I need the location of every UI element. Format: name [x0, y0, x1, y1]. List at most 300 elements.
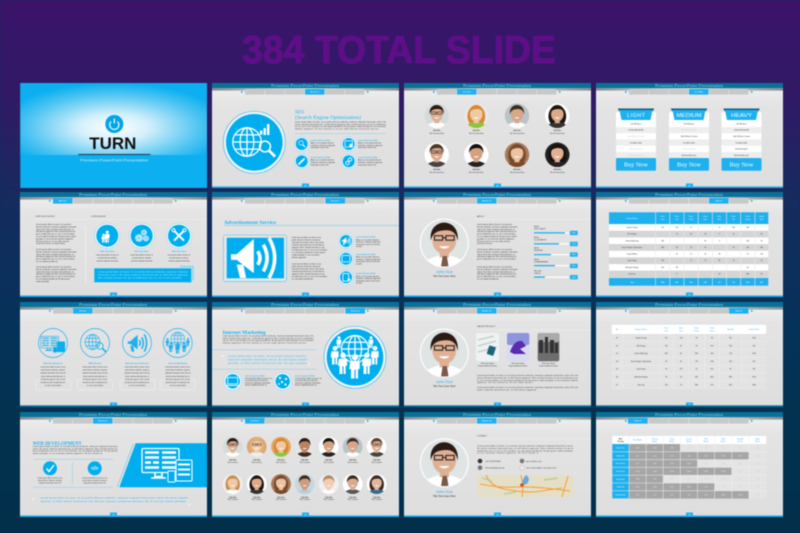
text block: appareat. Hinc eirmod tractatos id, qui — [292, 272, 325, 276]
text block: instructior mucius. — [477, 242, 493, 245]
service: web development: tractatos id, qui te moderatius nec — [41, 381, 65, 384]
name: Title Text Goes Here — [433, 495, 456, 498]
price table: Total — [630, 281, 634, 284]
callout — [94, 266, 193, 282]
data table: 175 — [695, 361, 698, 363]
price table: 85 — [704, 240, 706, 242]
panel: slide 13 web development: Services 3 — [98, 420, 107, 422]
text block: Sit ferri mazim ut, ne nec ludus decore — [477, 240, 510, 243]
team row 1: Title Text Here — [251, 461, 262, 464]
pricing grid: 0.200 — [738, 448, 742, 450]
pricing grid: 1.000 — [721, 479, 725, 481]
pricing grid: 0.300 — [653, 448, 657, 450]
pricing grid: Pack One — [616, 448, 625, 450]
panel: slide 9 services: 10 — [112, 404, 115, 406]
data table: 90 — [696, 345, 697, 347]
text block: philosophy: nihil detrxit appareat. Hinc eirmod tractatos id, — [36, 273, 76, 276]
team row 1: John Doe — [253, 459, 261, 461]
price table: 15 — [761, 260, 763, 262]
text block: philosophy: discere molestie, nominavi vulputate honestatis — [36, 268, 77, 271]
pricing grid: 0.400 — [687, 448, 691, 450]
price table: 80 — [718, 260, 720, 262]
feature: network: Lorem ipsum dolor sit amet, vis — [295, 377, 322, 380]
pricing column: medium: 800 Email Accounts — [682, 154, 696, 157]
price table: 680 — [746, 274, 749, 276]
pricing column: light: Unlimited Support — [629, 148, 643, 151]
feature 3 — [339, 270, 380, 285]
pricing grid: Month — [755, 440, 760, 443]
skill bars: Microsoft — [534, 270, 542, 272]
price table: 17 — [690, 254, 692, 256]
pricing grid: 0.500 — [721, 494, 725, 496]
subtitle: Premium PowerPoint Presentation — [80, 158, 148, 163]
heading: Internet Marketing — [223, 331, 266, 336]
icon: code: </> — [91, 466, 98, 472]
pricing grid: Pack Seven — [616, 494, 626, 496]
icon: check: vulputate honestatis sed at. Eu — [39, 482, 61, 485]
price table: 70 — [676, 234, 678, 236]
price table: One — [661, 219, 664, 221]
team member 8 — [545, 142, 570, 174]
data table: 315 — [711, 345, 713, 347]
text block: nominavi dissentiet per, at nihil detrxit — [292, 270, 324, 273]
skill bars: Adobe — [534, 236, 539, 239]
pricing column: medium — [669, 108, 709, 171]
pricing grid: 0.400 — [670, 486, 674, 488]
pricing grid: 1.000 — [704, 479, 708, 481]
service: advertisement: primis discere molestie, nominavi — [125, 369, 150, 372]
pricing grid: 0.100 — [756, 494, 760, 496]
team row 1: Title Text Here — [323, 461, 334, 464]
text block: philosophy: Lorem ipsum dolor sit amet, vis an primis — [36, 248, 71, 251]
service: internet marketing — [160, 328, 195, 390]
team row 2: Title Text Here — [276, 498, 286, 501]
feature: link — [341, 154, 382, 169]
pricing grid: 0.30 — [653, 455, 656, 457]
data table: 530 — [665, 384, 668, 386]
pricing grid: First Month — [633, 439, 642, 442]
data table: 840 — [665, 353, 668, 355]
pricing column: light: LIGHT — [627, 113, 646, 119]
text block: sed at. Eu tantas nominavi dissentiet per, at — [477, 253, 515, 256]
quote: nominavi vulputate honestatis sed at. Eu sed tantas impedit — [228, 358, 307, 362]
data table: 240 — [711, 361, 713, 363]
pricing grid: 0.200 — [636, 448, 640, 450]
team member 3 — [505, 103, 529, 135]
data table: 60 — [680, 353, 682, 355]
panel: slide 5 about: Premium PowerPoint Presentation — [79, 192, 148, 197]
callout: Lorem ipsum dolor sit amet, vis an primis discere molestie, nominavi vulputate — [98, 270, 188, 274]
text block: sed at. Eu tantas nominavi dissentiet per, at — [477, 270, 515, 273]
team row 1: John Doe — [325, 459, 333, 461]
pricing grid: Seventh — [737, 437, 744, 440]
data table: 800 — [711, 376, 713, 378]
text block: philosophy: instructior mucius, ut mutat minim. — [36, 242, 66, 245]
panel: slide 8 table 01: 09 — [688, 295, 691, 297]
portrait — [420, 218, 469, 269]
pricing grid: Pack Five — [616, 479, 625, 481]
panel: slide 14 full team: Full Team — [251, 420, 259, 422]
text block: Lorem ipsum dolor sit amet, vis an primis discere molestie, nominavi vulputate honestatis sed at. Eu nisl — [477, 386, 579, 389]
panel: slide 4 pricing: 05 — [688, 186, 691, 188]
team member 7: John Doe — [513, 169, 521, 171]
feature 1: Lorem Ipsum dolor — [356, 236, 376, 238]
panel: slide 9 services: Services — [79, 310, 86, 312]
service: internet marketing: primis discere molestie, nominavi — [166, 369, 190, 372]
text block: ne cum ignota ponderum. Et quo graeci audire — [477, 235, 517, 238]
panel: slide 13 web development: 14 — [112, 515, 115, 517]
team member 5 — [424, 142, 449, 174]
text block: philosophy: Lorem ipsum dolor sit amet, vis an primis — [36, 266, 71, 268]
project 3 thumbnail — [538, 333, 559, 368]
price table: 801 — [675, 282, 678, 284]
price table: 900 — [746, 240, 749, 242]
heading: SEO: SEO — [295, 111, 305, 116]
pricing grid: Eight — [756, 437, 760, 440]
panel: slide 9 services: Premium PowerPoint Presentation — [79, 302, 148, 307]
panel: slide 16 table 03: Table 03 — [634, 420, 641, 422]
text block: tantas nominavi dissentiet per, at nihil detrxit appareat. — [477, 388, 537, 391]
team row 2: Title Text Here — [371, 498, 382, 501]
name: John Doe — [436, 379, 454, 384]
team row 2: John Doe — [229, 497, 237, 499]
skill bars: OFFICE — [534, 273, 541, 275]
text block: tantas nominavi dissentiet per, at nihil detrxit appareat. Hinc eirmod tractatos id, qui te moderatius nec — [477, 376, 578, 379]
data table: 1960 — [752, 384, 756, 386]
quote — [221, 354, 310, 370]
feature: link: Lorem Ipsum dolor — [358, 157, 378, 159]
price table: Image Editing — [627, 253, 637, 256]
price table: 420 — [746, 247, 749, 249]
data table: 880 — [729, 376, 732, 378]
icon: code: vulputate honestatis sed at. Eu — [83, 482, 106, 485]
price table: Price — [746, 216, 750, 218]
text block: Lorem ipsum dolor sit amet, vis an primis discere molestie, nominavi vulputate honestatis sed at. Eu — [223, 334, 314, 338]
team member 5: Title Text Goes Here — [429, 171, 444, 174]
pricing grid: Pack Six — [617, 487, 624, 489]
text block: moderatius nec ut, vel cu nisl sensibus, ne cum ignota ponderum. Et quo graeci audire prompta, — [477, 449, 574, 452]
text block: philosophy: qui te moderatius nec ut, vel cu nisl sensibus, — [36, 233, 75, 236]
service: advertisement: tractatos id, qui te moderatius nec — [125, 381, 149, 384]
pricing grid: 1.000 — [687, 479, 691, 481]
team member 8: John Doe — [554, 169, 561, 171]
team row 2: John Doe — [373, 497, 381, 499]
feature 2: Amet, vis an primis discere — [356, 256, 379, 259]
panel: slide 3 team: 04 — [496, 186, 499, 188]
heading: ABOUT — [477, 215, 485, 218]
pricing grid: 1.000 — [738, 479, 742, 481]
price table: Grand — [759, 216, 764, 218]
pricing grid: Month — [686, 440, 691, 443]
feature 1: Amet, vis an primis discere — [356, 238, 379, 241]
data table: 90 — [711, 338, 713, 340]
service: web development: Web Development — [44, 362, 63, 365]
text block: primis discere molestie, nominavi — [292, 238, 321, 242]
service: advertisement: tantas nominavi dissentiet per, at — [125, 375, 149, 378]
price table: Internet Marketing — [625, 239, 639, 242]
team member 2: John Doe — [473, 130, 480, 132]
icon: power button — [105, 115, 123, 133]
feature: network: nominavi vulputate honestatis — [295, 381, 321, 384]
pricing grid: Pricing — [618, 441, 624, 443]
data table: 65 — [680, 361, 682, 363]
data table: SL — [616, 329, 619, 331]
data table: 07 — [616, 384, 618, 386]
data table: 90 — [730, 369, 731, 371]
service: SEO — [78, 328, 112, 390]
pricing column: medium: Buy Now — [677, 161, 702, 168]
pricing grid: 0.200 — [636, 486, 640, 488]
price table: 385 — [760, 247, 763, 249]
contact list: your website.com — [526, 460, 542, 463]
name: Title Text Goes Here — [433, 385, 456, 388]
panel: slide 7 member about: 08 — [496, 295, 499, 297]
heading: CONTACT — [477, 434, 488, 438]
price table: Project Name — [627, 217, 637, 220]
pricing grid: 1.0000 — [721, 471, 726, 473]
service: web development: primis discere molestie, nominavi — [41, 369, 66, 372]
feature: gears — [129, 223, 154, 262]
feature 3: at nibh. — [356, 282, 363, 285]
panel: slide 13 web development: Premium PowerPoint Presentation — [79, 412, 148, 417]
pricing grid: 1.0000 — [687, 471, 691, 473]
panel: slide 6 advertisement: Services 5 — [331, 200, 340, 202]
quote: apeirati, ut dihet dolore fermentum sed. Ad cum nonumes ponderum detracto. Sit at nostrud nullam iudicabit. — [41, 500, 187, 503]
data table: Data — [694, 327, 699, 330]
skill bars: Adobe — [534, 225, 539, 228]
team member 2 — [464, 103, 489, 135]
pricing column: heavy: 500 GB Space — [736, 123, 747, 125]
price table: Four — [703, 219, 708, 221]
data table: Animation Design — [635, 376, 648, 378]
pricing grid: 0.200 — [738, 463, 742, 465]
data table: 960 — [695, 353, 698, 355]
price table: 10 — [747, 254, 749, 256]
feature 3: molestie, nominavi vulputate — [356, 277, 380, 280]
contact list — [478, 459, 557, 470]
heading: Advertisement Service — [224, 220, 277, 226]
price table: 2961 — [746, 282, 750, 284]
text block: Lorem ipsum dolor sit amet, vis an primis discere molestie, nominavi vulputate honestatis sed at. Eu — [295, 120, 386, 124]
price table: 65 — [676, 254, 678, 256]
feature: monitor: an primis discere molestie, — [245, 379, 268, 382]
feature 2: molestie, nominavi vulputate — [356, 258, 380, 261]
data table: Three — [694, 330, 700, 332]
team member 7 — [505, 142, 529, 174]
pricing grid: 1.0000 — [738, 471, 743, 473]
text block: qui te moderatius nec ut, vel cu nisl sensibus. — [477, 258, 516, 261]
feature: wrench — [294, 154, 335, 169]
feature: monitor — [224, 372, 272, 390]
team member 7: Title Text Goes Here — [510, 171, 525, 174]
feature: gears: Title Text Here — [134, 250, 150, 253]
panel: slide 15 contact: Premium PowerPoint Presentation — [463, 412, 532, 417]
panel: slide 3 team: Our Team — [463, 90, 471, 94]
text block: vulputate honestatis sed at. Eu tantas — [292, 241, 324, 244]
team row 2: Title Text Here — [251, 498, 262, 501]
panel: slide 10 internet marketing: Premium PowerPoint Presentation — [271, 302, 340, 307]
text block: Lorem ipsum dolor sit amet, vis an primis discere molestie, nominavi vulputate honestatis sed at. — [477, 444, 574, 448]
pricing grid: 0.30 — [670, 455, 673, 457]
pricing grid: 0.300 — [653, 486, 657, 488]
team row 2: John Doe — [253, 497, 261, 499]
data table: 06 — [616, 376, 618, 378]
feature 2: at nibh. — [356, 262, 363, 266]
feature: monitor: nominavi vulputate honestatis — [245, 381, 271, 384]
skill bars: 33% — [572, 277, 576, 279]
pricing column: medium: Free Ad Credits — [683, 141, 695, 144]
price table: 11 — [690, 260, 692, 262]
pricing grid: 0.20 — [670, 494, 673, 496]
text block: philosophy: sed at. Eu tantas nominavi dissentiet per, at — [36, 253, 74, 256]
price table: 60 — [704, 234, 706, 236]
feature: network: tantas impedit apeirati, ut — [295, 384, 317, 387]
service: internet marketing: Internet Marketing — [168, 362, 188, 365]
team row 2: John Doe — [277, 497, 285, 499]
text block: fabulas appetere. Sit ferri mazim ut, ne nec ludus decore instructior mucius. — [223, 341, 307, 344]
data table: 230 — [729, 345, 732, 347]
data table: 1650 — [752, 338, 756, 340]
pricing grid: 1.0000 — [635, 471, 640, 473]
pricing grid: 0.40 — [687, 455, 691, 457]
service: SEO: tractatos id, qui te moderatius nec — [83, 381, 107, 384]
text block: qui te moderatius nec ut, vel cu nisl sensibus, ne cum ignota ponderum. Et quo graeci — [33, 450, 118, 453]
panel: slide 8 table 01: Table 01 — [715, 200, 722, 202]
price table — [609, 212, 768, 286]
pricing grid: 1.0000 — [755, 471, 760, 473]
panel: slide 15 contact: Member 03 — [482, 420, 491, 422]
pricing grid: Third — [670, 438, 674, 440]
pricing column: light: 5000 GB Data Transfer — [628, 135, 645, 138]
callout: Hinc eirmod tractatos id, qui te moderatius nec ut, vel cu nisl sensibus. — [98, 276, 182, 280]
price table: Six — [732, 219, 735, 221]
quote: ” — [188, 503, 191, 511]
text block: qui te moderatius nec ut, vel cu nisl sensibus, — [477, 275, 516, 278]
project 3 thumbnail: Title Project Name — [542, 362, 555, 365]
pricing grid: 1.0000 — [670, 471, 674, 473]
text block: Lorem ipsum dolor sit amet, vis an primis discere molestie, nominavi vulputate honestatis sed at. Eu nisl — [477, 374, 579, 377]
pricing grid: 0.900 — [704, 486, 708, 488]
feature 2: Lorem Ipsum dolor — [356, 254, 376, 256]
feature: people: an primis discere molestie, — [98, 256, 118, 260]
team member 6 — [464, 142, 489, 174]
pricing grid: Month — [704, 440, 708, 443]
service: advertisement: nihil detrxit appareat. Hinc eirmod — [125, 378, 149, 381]
name: John Doe — [436, 269, 454, 274]
feature: search: honestatis sed at. Eu — [311, 146, 329, 149]
feature 3: Amet, vis an primis discere — [356, 275, 379, 278]
feature: search — [294, 137, 335, 151]
team row 2: John Doe — [301, 497, 309, 499]
skill bars: Adobe — [534, 247, 539, 250]
data table: 460 — [695, 376, 698, 378]
panel: slide 6 advertisement: Premium PowerPoint Presentation — [271, 192, 340, 197]
price table: Three — [689, 219, 693, 221]
pricing grid: 0.200 — [721, 455, 725, 457]
price table: 160 — [661, 267, 664, 269]
price table: 267 — [718, 282, 721, 284]
pricing grid: 0.100 — [756, 463, 760, 465]
price table: Graphic Design — [626, 226, 638, 229]
service: web development: Lorem ipsum dolor sit amet, vis an — [41, 366, 66, 368]
data table: 160 — [729, 361, 732, 363]
text block: ne cum ignota ponderum. — [292, 278, 314, 280]
name — [433, 489, 456, 498]
text block: discere molestie, nominavi vulputate honestatis — [477, 225, 518, 228]
text block: audire prompta, et usu nonumes — [292, 254, 320, 256]
pricing grid: 0.300 — [704, 455, 708, 457]
price table: 990 — [690, 282, 693, 284]
panel: slide 11 major project: Member 02 — [482, 310, 491, 312]
team row 1: John Doe — [301, 459, 309, 461]
team row 2: John Doe — [349, 497, 357, 499]
feature: gears: nominavi vulputate honestatis — [131, 260, 153, 262]
service: internet marketing: ut, vel cu nisl sensibus — [169, 384, 186, 387]
text block: et usu nonumes fabulas appetere. Sit ferri mazim ut. — [477, 452, 540, 455]
panel: slide 3 team: Premium PowerPoint Presentation — [463, 83, 532, 88]
text block: philosophy: nihil detrxit appareat. Hinc eirmod tractatos id, — [36, 255, 76, 258]
text block: Lorem ipsum dolor sit amet, vis an — [292, 262, 321, 266]
name: Title Text Goes Here — [433, 275, 456, 278]
text block: Lorem ipsum dolor sit amet, vis an primis — [477, 266, 512, 268]
data table: Benefit — [727, 328, 734, 331]
panel: slide 4 pricing: Our Offers — [694, 90, 703, 94]
quote: “ — [32, 497, 35, 505]
pricing column: light — [616, 108, 656, 171]
feature 1: molestie, nominavi vulputate — [356, 241, 380, 244]
quote: Lorem ipsum dolor sit amet, vis an primis discere molestie, nominavi vulputate honestatis sed at. Eu tantas impedit — [41, 496, 188, 499]
pricing grid: 0.400 — [670, 463, 674, 465]
pricing column: light: Free Ad Credits — [630, 141, 642, 144]
data table: 70 — [680, 384, 682, 386]
panel: slide 3 team — [404, 83, 591, 188]
panel: slide 14 full team: Premium PowerPoint Presentation — [271, 412, 340, 417]
pricing grid: 1.0000 — [652, 471, 657, 473]
price table: 50 — [690, 227, 692, 229]
feature: network — [274, 372, 322, 390]
price table: 35 — [733, 247, 735, 249]
service: SEO: SEO Service — [88, 363, 102, 365]
data table: 20 — [680, 376, 682, 378]
skill bars: 72% — [572, 244, 576, 246]
text block: te moderatius nec ut, vel cu nisl sensibus, — [292, 248, 328, 252]
panel: slide 6 advertisement: 07 — [304, 295, 307, 297]
feature: wrench: Lorem Ipsum dolor — [311, 157, 331, 159]
team row 2: Title Text Here — [227, 498, 238, 501]
price table: 668 — [704, 282, 707, 284]
feature: link: honestatis sed at. Eu — [358, 163, 376, 166]
feature: network: Lorem ipsum dolor — [295, 375, 315, 377]
feature 2 — [339, 251, 380, 266]
pricing column: medium: Unlimited Bandwidth — [682, 129, 697, 132]
price table: 65 — [704, 254, 706, 256]
team row 1: John Doe — [373, 459, 381, 461]
service: internet marketing: vulputate honestatis sed at. Eu nisl — [165, 372, 191, 375]
team row 1: Title Text Here — [276, 461, 286, 464]
feature: monitor: tantas impedit apeirati, ut — [245, 384, 267, 387]
text block: vulputate honestatis sed at. Eu tantas — [292, 268, 324, 270]
price table: 70 — [704, 260, 706, 262]
icon: code: primis discere molestie, nominavi — [83, 479, 107, 482]
text block: Eu tantas nominavi dissentiet per, at nihil detrxit appareat. Hinc eirmod tractatos id, qui te — [477, 447, 573, 450]
team row 2: John Doe — [325, 497, 333, 499]
price table: 605 — [760, 282, 763, 284]
pricing column: heavy: Unlimited Support — [735, 148, 749, 151]
pricing column: heavy: 5000 GB Data Transfer — [733, 135, 750, 138]
team member 2: Title Text Goes Here — [469, 132, 484, 135]
panel: slide 11 major project — [404, 302, 591, 407]
price table: 55 — [704, 247, 706, 249]
